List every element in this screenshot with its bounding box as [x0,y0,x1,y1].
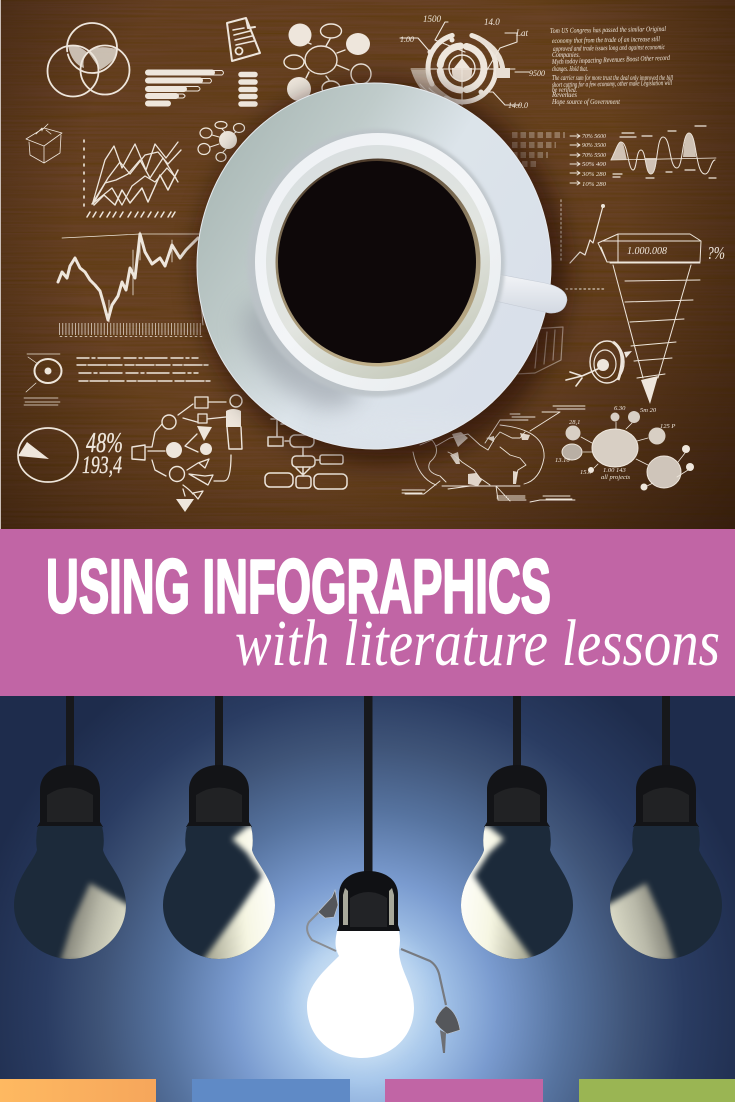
sketch: flow chart [132,395,242,512]
sketch: bubble chart [555,405,694,490]
title band [0,529,735,696]
sketch: horizontal bar chart [148,70,224,104]
sketch: faint squiggle near saucer [516,327,563,374]
light bulb 4 [455,696,573,965]
sketch: arrow list: 50% 400 [582,161,607,168]
sketch: venn diagram [48,23,130,96]
chart labels [400,14,545,110]
coffee cup and saucer [197,83,567,449]
sketch: bubble chart: 28,1 [569,419,580,426]
cup handle [495,274,567,313]
chart labels: Lat [515,28,529,38]
sketch: pie chart with figures [18,428,123,482]
green bar [579,1079,735,1102]
sketch: handwritten paragraph: Companies. [552,51,580,59]
sketch: handwritten paragraph: The carrier sum for more trust the deal only improved the bill [552,74,673,82]
sketch: stacked bars [241,74,255,104]
sketch: arrow list: 10% 280 [582,181,607,188]
sketch: handwritten paragraph: Tom US Congress has passed the similar Original [550,25,666,35]
sketch: open box icon [26,124,62,163]
sketch: wave chart [611,126,716,178]
center lit bulb character [299,696,460,1066]
sketch: arrow list: 70% 5500 [582,152,607,159]
chart labels: 14.0 [484,17,500,27]
sketch: arrow list: 70% 5600 [582,133,607,140]
sketch: small node cluster [198,122,244,162]
sketch: bubble chart: 1.00 143 [603,467,626,474]
chart labels: 1.00 [400,35,414,44]
sketch: handwritten paragraph: short cutting for a few economy, other make Legislation will [552,79,672,89]
funnel note: ?% [707,243,725,263]
sketch: arrow list [570,133,607,188]
color bars footer [0,1079,735,1102]
figure: 48%: 48% [86,428,123,459]
sketch: handwritten paragraph: Revenues [551,91,577,99]
socket [337,871,400,931]
coffee surface [278,161,476,363]
orange bar [0,1079,156,1102]
sketch: handwritten paragraph: Hope source of Government [551,98,621,106]
sketch: line chart [84,140,181,217]
sketch: bubble chart: all projects [601,474,631,481]
photo panel: hanging light bulbs [0,696,735,1102]
sketch: radial chart [400,14,545,110]
figure: 193,4: 193,4 [82,452,122,479]
sketch: bubble chart: 6.30 [614,405,626,412]
light bulb 5 [606,696,722,962]
sketch: rising line [561,200,605,289]
sketch: target with arrow [566,341,632,386]
sketch: bubble chart: 15.0 [580,469,592,476]
cup body [247,129,505,397]
sketch: document icon [227,18,260,61]
sketch: process boxes [265,410,347,489]
sketch: arrow list: 30% 280 [581,171,607,178]
saucer shadow [196,80,568,464]
chart labels: 1500 [423,14,442,24]
sketch: handwritten paragraph: changes. Hold that. [552,65,588,73]
light bulb 1 [14,696,130,962]
saucer [197,83,551,449]
blue wall background [0,696,735,1102]
sketch: pictogram rows [512,135,565,164]
sketch: handwriting block [77,358,210,381]
photo panel: coffee cup on wooden desk with sketches [0,0,735,530]
chart labels: 9500 [529,69,545,78]
right arm pointing down [401,949,460,1053]
sketch: arrow list: 90% 3500 [582,142,607,149]
sketch: handwritten paragraph: be verified. [552,86,577,94]
sketch: bubble chart: 125 P [660,423,675,430]
sketch: volume strip [59,290,203,336]
chart labels: 14.0.0 [508,101,528,110]
funnel value: 1.000.008 [627,246,667,257]
sketch: funnel [598,234,725,404]
left arm [307,890,338,951]
cord [364,696,372,872]
sketch: handwritten paragraph: Myth today impacting Revenues Boost Other record [551,54,670,66]
sketch: handwritten paragraph [550,25,673,106]
coffee crema ring [276,158,480,366]
glow [299,934,423,1066]
bulb glass [307,931,414,1058]
sketch: stock chart [58,232,200,322]
wooden desk background [0,0,735,530]
sketch: handwritten paragraph: approved and trade issues long and against economic [553,43,666,53]
blue bar [192,1079,350,1102]
sketch: target icon with notes [24,354,62,405]
light bulb 2 [163,696,281,965]
sketch: bubble chart: 13.10 [555,457,570,464]
sketch: handwritten paragraph: economy that from the trade of an increase still [552,35,660,45]
sketch: node diagram [284,24,371,101]
sketch: bubble chart: 5m 20 [640,407,657,414]
pink bar [385,1079,543,1102]
sketch: world map [402,406,585,502]
